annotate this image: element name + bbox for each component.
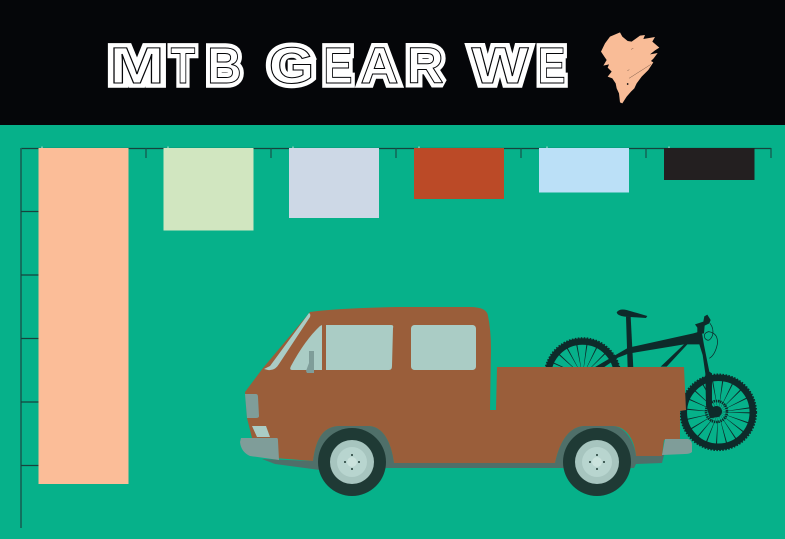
front wheel (318, 428, 386, 496)
bar 3 (289, 148, 379, 218)
door window (326, 325, 393, 370)
title: E (323, 37, 352, 94)
title: B (207, 37, 242, 94)
title: A (360, 37, 398, 94)
title: W (472, 37, 530, 94)
title: G (269, 37, 314, 94)
bar 5 (539, 148, 629, 192)
title: T (171, 37, 195, 94)
bar chart (21, 146, 771, 528)
title: M (110, 37, 164, 94)
front bike wheel (680, 374, 756, 450)
side vent window (290, 325, 322, 370)
title: B (207, 37, 242, 94)
indicator light (252, 426, 270, 437)
title: M (110, 37, 164, 94)
title: G (269, 37, 314, 94)
rear cab window (411, 325, 476, 370)
illustration: pickup truck (240, 307, 692, 496)
seat post (626, 317, 633, 368)
icon: scribbled heart (601, 32, 659, 103)
windshield strip (264, 313, 310, 370)
handlebars and stem (695, 315, 711, 334)
rear bumper (662, 439, 692, 455)
title: A (360, 37, 398, 94)
truck underside and arches (262, 426, 664, 470)
bar 4 (414, 148, 504, 199)
title: R (407, 37, 444, 94)
truck cab body (245, 307, 686, 463)
bar 6 (664, 148, 754, 180)
bar 2 (164, 148, 254, 230)
brake cables (704, 323, 717, 358)
side mirror (306, 351, 314, 373)
bike frame and fork (590, 310, 720, 418)
rear wheel (563, 428, 631, 496)
bar 1 (38, 148, 128, 484)
rear bike wheel (544, 338, 620, 414)
front bumper (240, 438, 279, 460)
title: W (472, 37, 530, 94)
brake disc (706, 401, 727, 422)
title: E (323, 37, 352, 94)
title (110, 37, 565, 94)
title: E (538, 37, 566, 94)
header band (0, 0, 785, 125)
title: E (538, 37, 566, 94)
headlight (245, 394, 259, 418)
title: T (171, 37, 195, 94)
chart axes (21, 146, 771, 528)
saddle (617, 310, 647, 318)
title: R (407, 37, 444, 94)
illustration: bike behind truck (544, 310, 756, 450)
